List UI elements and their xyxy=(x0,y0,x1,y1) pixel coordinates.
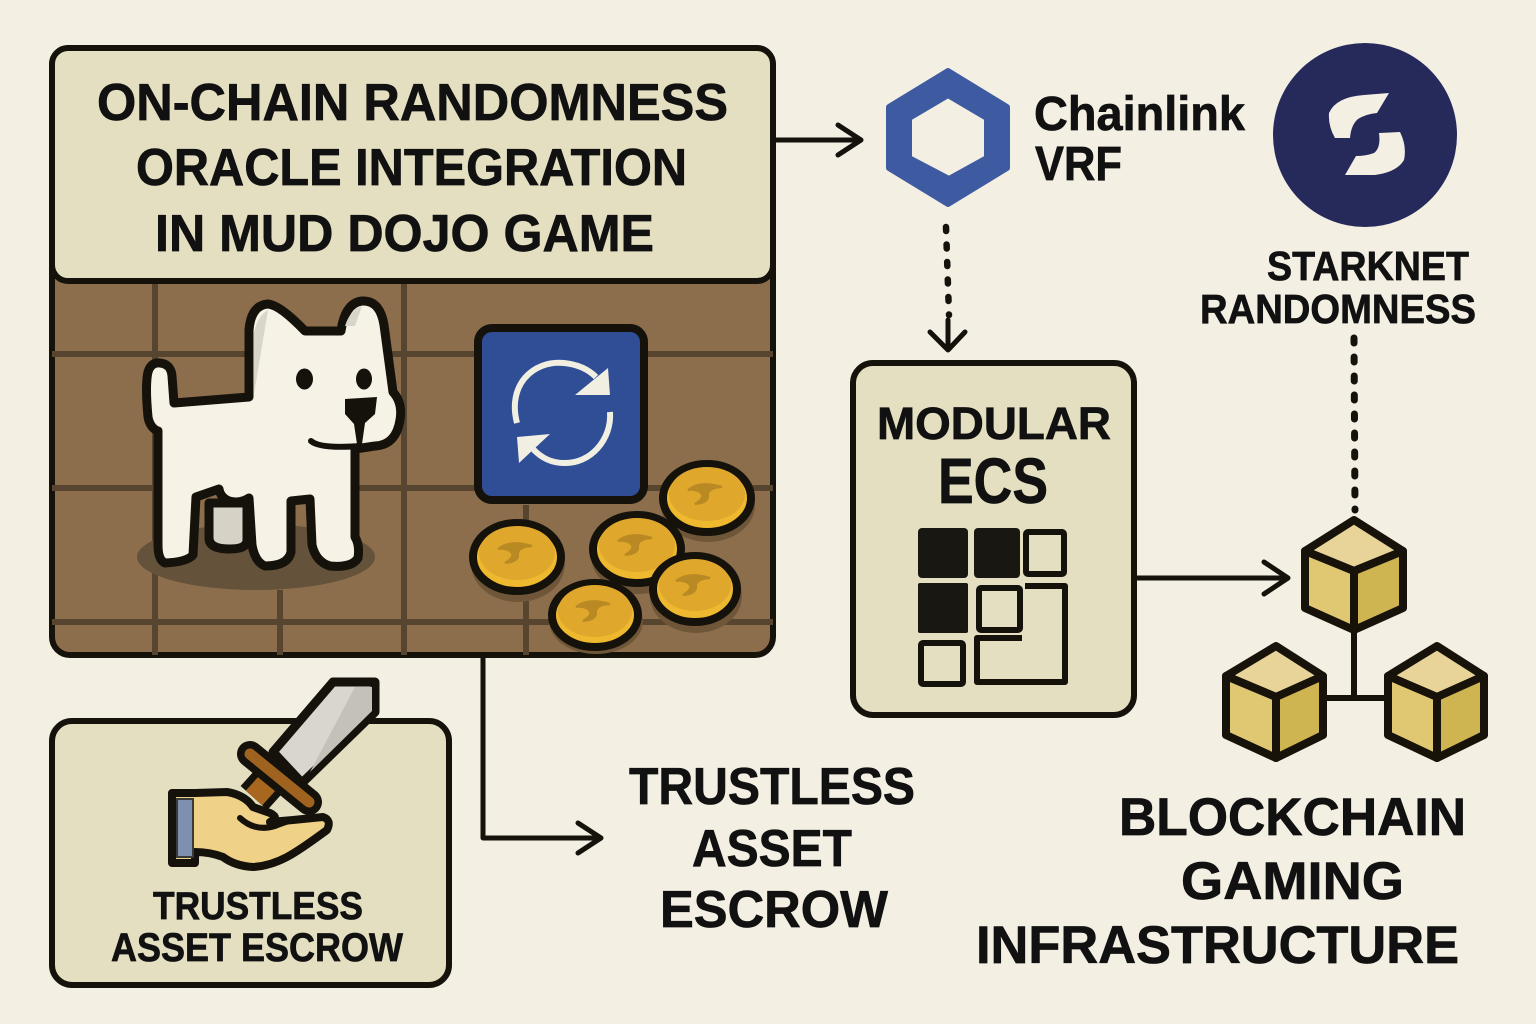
icon: Starknet logo xyxy=(1273,43,1457,227)
coin 3 xyxy=(591,515,685,594)
heading: blockchain gaming infrastructure: GAMING xyxy=(1181,852,1404,911)
coin 1 xyxy=(661,464,755,542)
icon: sword on hand xyxy=(172,682,375,867)
icon: right block xyxy=(1388,646,1484,758)
coin 4 xyxy=(650,556,742,633)
heading: trustless asset escrow: TRUSTLESS xyxy=(629,758,915,816)
icon: blue randomness card xyxy=(478,328,644,500)
title line 3: IN MUD DOJO GAME xyxy=(155,205,654,263)
connector: blockchain links xyxy=(1327,630,1384,698)
dog shadow xyxy=(137,524,375,590)
coin 5 xyxy=(549,583,643,654)
title line 1: ON-CHAIN RANDOMNESS xyxy=(97,74,728,132)
arrow: Starknet dotted to blocks xyxy=(1354,338,1355,510)
heading: blockchain gaming infrastructure: BLOCKCHAIN xyxy=(1119,788,1466,847)
arrow: Chainlink dotted to ECS xyxy=(930,227,965,350)
icon: top block xyxy=(1305,520,1403,630)
label: Chainlink VRF: Chainlink xyxy=(1034,88,1245,141)
arrow: title to Chainlink xyxy=(775,125,861,155)
panel: asset escrow xyxy=(52,682,449,985)
label: Starknet randomness: STARKNET xyxy=(1267,243,1469,289)
arrow: board to trustless escrow xyxy=(483,657,601,853)
icon: module grid xyxy=(918,528,1065,684)
icon: white dog xyxy=(146,301,401,566)
arrow: ECS to blockchain xyxy=(1137,562,1288,594)
label: asset escrow: ASSET ESCROW xyxy=(111,926,403,970)
label: Starknet randomness: RANDOMNESS xyxy=(1200,286,1476,332)
heading: trustless asset escrow xyxy=(629,758,915,939)
coin 2 xyxy=(471,523,565,602)
panel: Modular ECS xyxy=(853,363,1134,715)
panel: game board xyxy=(52,48,773,655)
label: Chainlink VRF xyxy=(1034,88,1245,191)
heading: ECS: ECS xyxy=(938,445,1048,517)
label: Starknet randomness xyxy=(1200,243,1476,332)
label: Chainlink VRF: VRF xyxy=(1035,138,1122,191)
heading: trustless asset escrow: ESCROW xyxy=(660,881,889,939)
heading: blockchain gaming infrastructure xyxy=(976,788,1466,975)
panel: title xyxy=(52,48,773,281)
heading: trustless asset escrow: ASSET xyxy=(692,820,852,878)
icon: left block xyxy=(1226,646,1323,758)
label: trustless: TRUSTLESS xyxy=(153,885,363,928)
title line 2: ORACLE INTEGRATION xyxy=(136,139,687,197)
icon: gold coins xyxy=(471,464,755,654)
heading: blockchain gaming infrastructure: INFRASTRUCTURE xyxy=(976,916,1459,975)
heading: Modular: MODULAR xyxy=(877,398,1111,449)
icon: Chainlink hexagon xyxy=(889,71,1007,204)
